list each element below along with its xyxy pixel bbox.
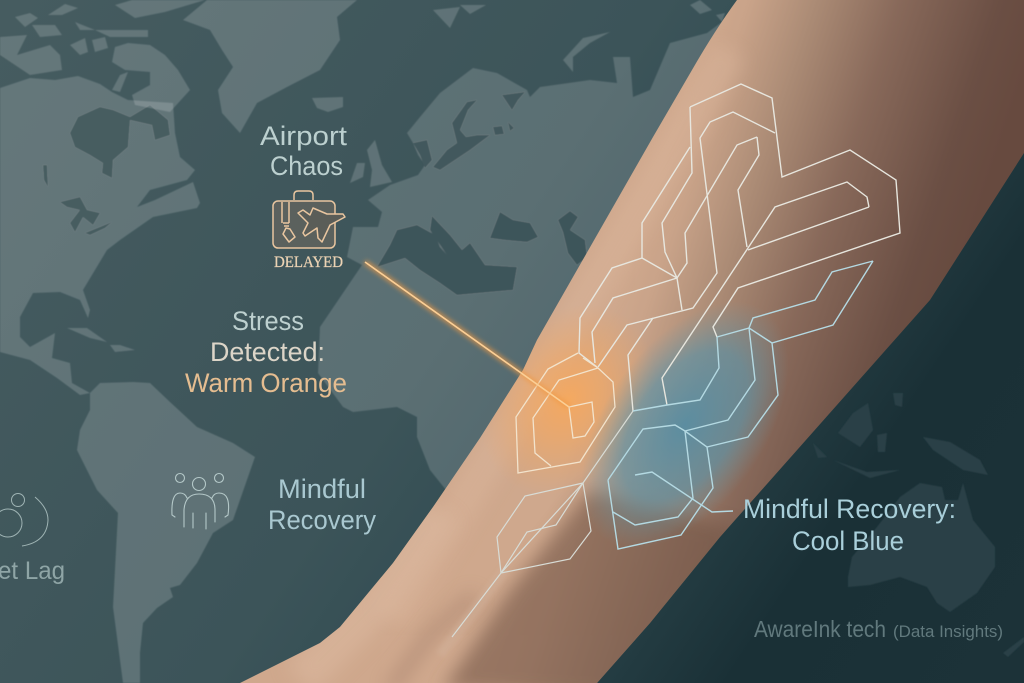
- text: Stress Detected Warm Orange: Detected:: [210, 337, 325, 367]
- text: Mindful Recovery: Mindful: [278, 474, 366, 504]
- map: Mediterranean Sea: [377, 216, 517, 295]
- circuit tattoo: upper white lines: [579, 84, 900, 411]
- heading: Airport Chaos: Chaos: [270, 151, 343, 181]
- map: Caribbean islands: [67, 328, 135, 352]
- text: Stress Detected Warm Orange: Stress: [232, 306, 304, 336]
- text: Mindful Recovery Cool Blue: Mindful Recovery:: [743, 494, 956, 524]
- text: Stress Detected Warm Orange: [185, 306, 347, 398]
- text: Mindful Recovery: [268, 474, 376, 535]
- map: North America: [0, 76, 200, 395]
- orange connector line: [365, 262, 569, 407]
- skin highlight along the edge: [390, 50, 730, 620]
- wrist tendon shadow: [390, 595, 475, 683]
- map: Great Lakes: [43, 165, 112, 235]
- heading: Airport Chaos: Airport: [260, 121, 348, 151]
- map: Black Sea: [490, 212, 538, 242]
- map: northern islands: [433, 0, 725, 72]
- map: Hudson Bay: [70, 105, 170, 178]
- map: Caspian Sea: [558, 211, 587, 265]
- text: Stress Detected Warm Orange: Warm Orange: [185, 368, 347, 398]
- text: Mindful Recovery: Recovery: [268, 505, 376, 535]
- icon: jet lag moon and circles: [0, 494, 48, 546]
- brand: AwareInk tech Data Insights: (Data Insights): [893, 622, 1003, 641]
- brand: AwareInk tech Data Insights: [754, 616, 1003, 642]
- skin base: [230, 0, 1024, 683]
- icon: delayed suitcase with plane: [273, 191, 345, 248]
- map: Arctic islands: [0, 0, 205, 112]
- map: Baltic Sea: [413, 92, 525, 170]
- map: Eurasia and Africa: [318, 5, 760, 520]
- map: Australia and Indonesia: [813, 393, 1024, 657]
- text: Mindful Recovery Cool Blue: Cool Blue: [792, 526, 904, 556]
- text: Mindful Recovery Cool Blue: [743, 494, 956, 556]
- circuit tattoo: leaf lines: [452, 411, 633, 637]
- brand: AwareInk tech Data Insights: AwareInk tech: [754, 616, 886, 642]
- blue recovery glow: [587, 312, 782, 540]
- icon: group of people: [172, 474, 229, 529]
- orange stress glow: [495, 320, 637, 478]
- forearm: [230, 0, 1024, 683]
- map: Greenland: [183, 0, 357, 133]
- map: British Isles: [350, 140, 392, 187]
- heading: Airport Chaos: [260, 121, 348, 181]
- wrist highlight: [300, 510, 440, 680]
- circuit tattoo: blue zone lines: [608, 261, 873, 549]
- wrist light strip: [455, 586, 493, 636]
- lower arm shading: [443, 490, 740, 683]
- map: Iceland: [312, 97, 343, 112]
- circuit tattoo: orange zone lines: [516, 353, 615, 473]
- map: South America: [77, 382, 255, 683]
- label: DELAYED: DELAYED: [274, 254, 343, 271]
